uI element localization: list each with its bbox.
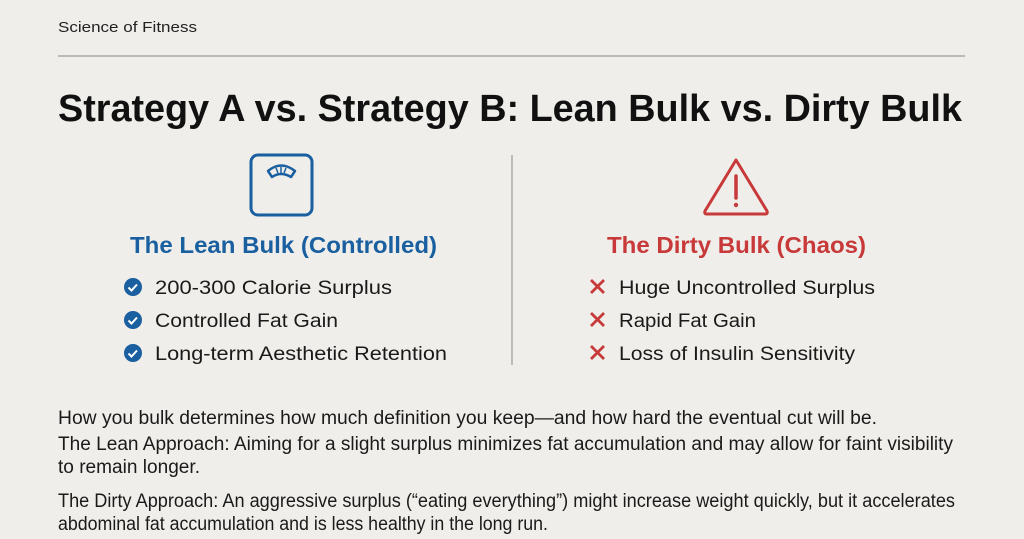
- text block: explanation: The Dirty Approach: An aggressive surplus (“eating everything”) might increase weight quickly, but it accelerates: [58, 491, 955, 512]
- list: lean benefits: [124, 278, 447, 365]
- list: dirty drawbacks: Loss of Insulin Sensitivity: [619, 344, 856, 365]
- text block: explanation: The Lean Approach: Aiming for a slight surplus minimizes fat accumulation and may allow for faint visibility: [58, 434, 953, 455]
- list: lean benefits: Controlled Fat Gain: [155, 311, 338, 332]
- list: lean benefits: Long-term Aesthetic Retention: [155, 344, 447, 365]
- list: dirty drawbacks: Rapid Fat Gain: [619, 311, 756, 332]
- list: dirty drawbacks: [591, 278, 875, 365]
- icon: scale: [251, 155, 312, 215]
- panel: lean bulk: [124, 155, 447, 365]
- icon: warning triangle: [705, 160, 767, 214]
- text block: explanation: to remain longer.: [58, 457, 200, 478]
- panel: dirty bulk: [591, 160, 875, 365]
- heading: lean bulk: The Lean Bulk (Controlled): [130, 232, 437, 258]
- header label: Science of Fitness: [58, 19, 197, 36]
- list: lean benefits: 200-300 Calorie Surplus: [155, 278, 392, 299]
- title: Strategy A vs. Strategy B: Lean Bulk vs. Dirty Bulk: [58, 88, 963, 130]
- text block: explanation: How you bulk determines how much definition you keep—and how hard the eventual cut will be.: [58, 408, 877, 429]
- text block: explanation: [58, 408, 955, 535]
- list: dirty drawbacks: Huge Uncontrolled Surplus: [619, 278, 875, 299]
- text block: explanation: abdominal fat accumulation and is less healthy in the long run.: [58, 514, 548, 535]
- heading: dirty bulk: The Dirty Bulk (Chaos): [607, 232, 866, 258]
